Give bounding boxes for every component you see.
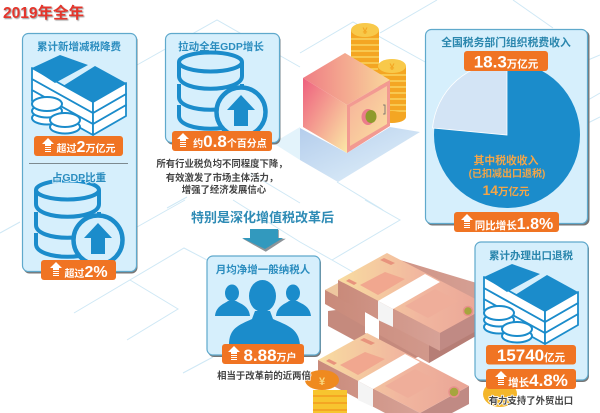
illustration: safe and gold coins (300, 23, 420, 182)
illustration: gold coins bottom (305, 370, 517, 413)
title: 2019年全年 (3, 3, 84, 22)
value pill: over 2 percent: 超过2% (64, 264, 108, 281)
value pill: over 2 trillion: 超过2万亿元 (57, 139, 115, 156)
caption: GDP effect: 有效激发了市场主体活力， (166, 172, 278, 183)
value pill: 18.3 trillion: 18.3万亿元 (474, 52, 539, 72)
illustration: safe and gold coins: ¥ (389, 62, 395, 72)
panel heading: tax cuts: 累计新增减税降费 (37, 40, 121, 53)
value pill: up 1.8 percent (454, 212, 559, 233)
pie label: (已扣减出口退税) (469, 167, 545, 180)
value pill: up 4.8 percent: 增长4.8% (508, 371, 568, 390)
icon: people (215, 280, 311, 345)
pie label (469, 153, 545, 198)
top wad of upper stack (338, 253, 489, 351)
value pill: up 1.8 percent: 同比增长1.8% (475, 216, 553, 233)
panel heading: GDP growth: 拉动全年GDP增长 (178, 40, 264, 53)
value pill: over 2 percent (41, 260, 116, 281)
icon: database up (179, 52, 266, 136)
panel: tax cuts (22, 34, 138, 281)
panel heading: rebates: 累计办理出口退税 (489, 249, 573, 262)
caption: rebates: 有力支持了外贸出口 (489, 395, 573, 406)
panel: GDP growth (166, 34, 280, 151)
lower stack (318, 333, 469, 413)
panel heading: revenue: 全国税务部门组织税费收入 (441, 35, 571, 49)
illustration: gold coins bottom: ¥ (319, 376, 326, 388)
caption: GDP effect: 所有行业税负均不同程度下降， (156, 158, 288, 169)
caption: taxpayers: 相当于改革前的近两倍 (217, 370, 311, 381)
value pill: 15740: 15740亿元 (497, 346, 566, 365)
value pill: up 4.8 percent (486, 369, 576, 390)
panel: national tax revenue (426, 30, 590, 233)
panel: export rebates (475, 242, 589, 390)
pie label: 14万亿元 (482, 182, 530, 198)
lowest wads of upper stack (328, 290, 500, 365)
pie label: 其中税收收入 (474, 153, 539, 167)
icon: cash stack (484, 264, 578, 344)
value pill: over 2 trillion (34, 136, 123, 156)
panel: new taxpayers (207, 256, 321, 365)
caption: GDP effect (156, 158, 288, 195)
panel heading: taxpayers: 月均净增一般纳税人 (216, 263, 311, 276)
icon: cash stack (32, 55, 126, 135)
value pill: 0.8 point: 约0.8个百分点 (193, 132, 267, 151)
pie chart (432, 62, 580, 208)
caption: GDP effect: 增强了经济发展信心 (182, 184, 267, 195)
pale backdrop triangle (273, 127, 300, 160)
value pill: 8.88: 8.88万户 (243, 346, 297, 365)
icon: database up (36, 180, 122, 264)
arrow: down (242, 229, 286, 252)
illustration: safe and gold coins: ¥ (362, 26, 368, 36)
subheading: 特别是深化增值税改革后 (191, 210, 334, 225)
illustration: money stacks (318, 253, 500, 413)
panel heading: share of GDP: 占GDP比重 (52, 171, 107, 184)
